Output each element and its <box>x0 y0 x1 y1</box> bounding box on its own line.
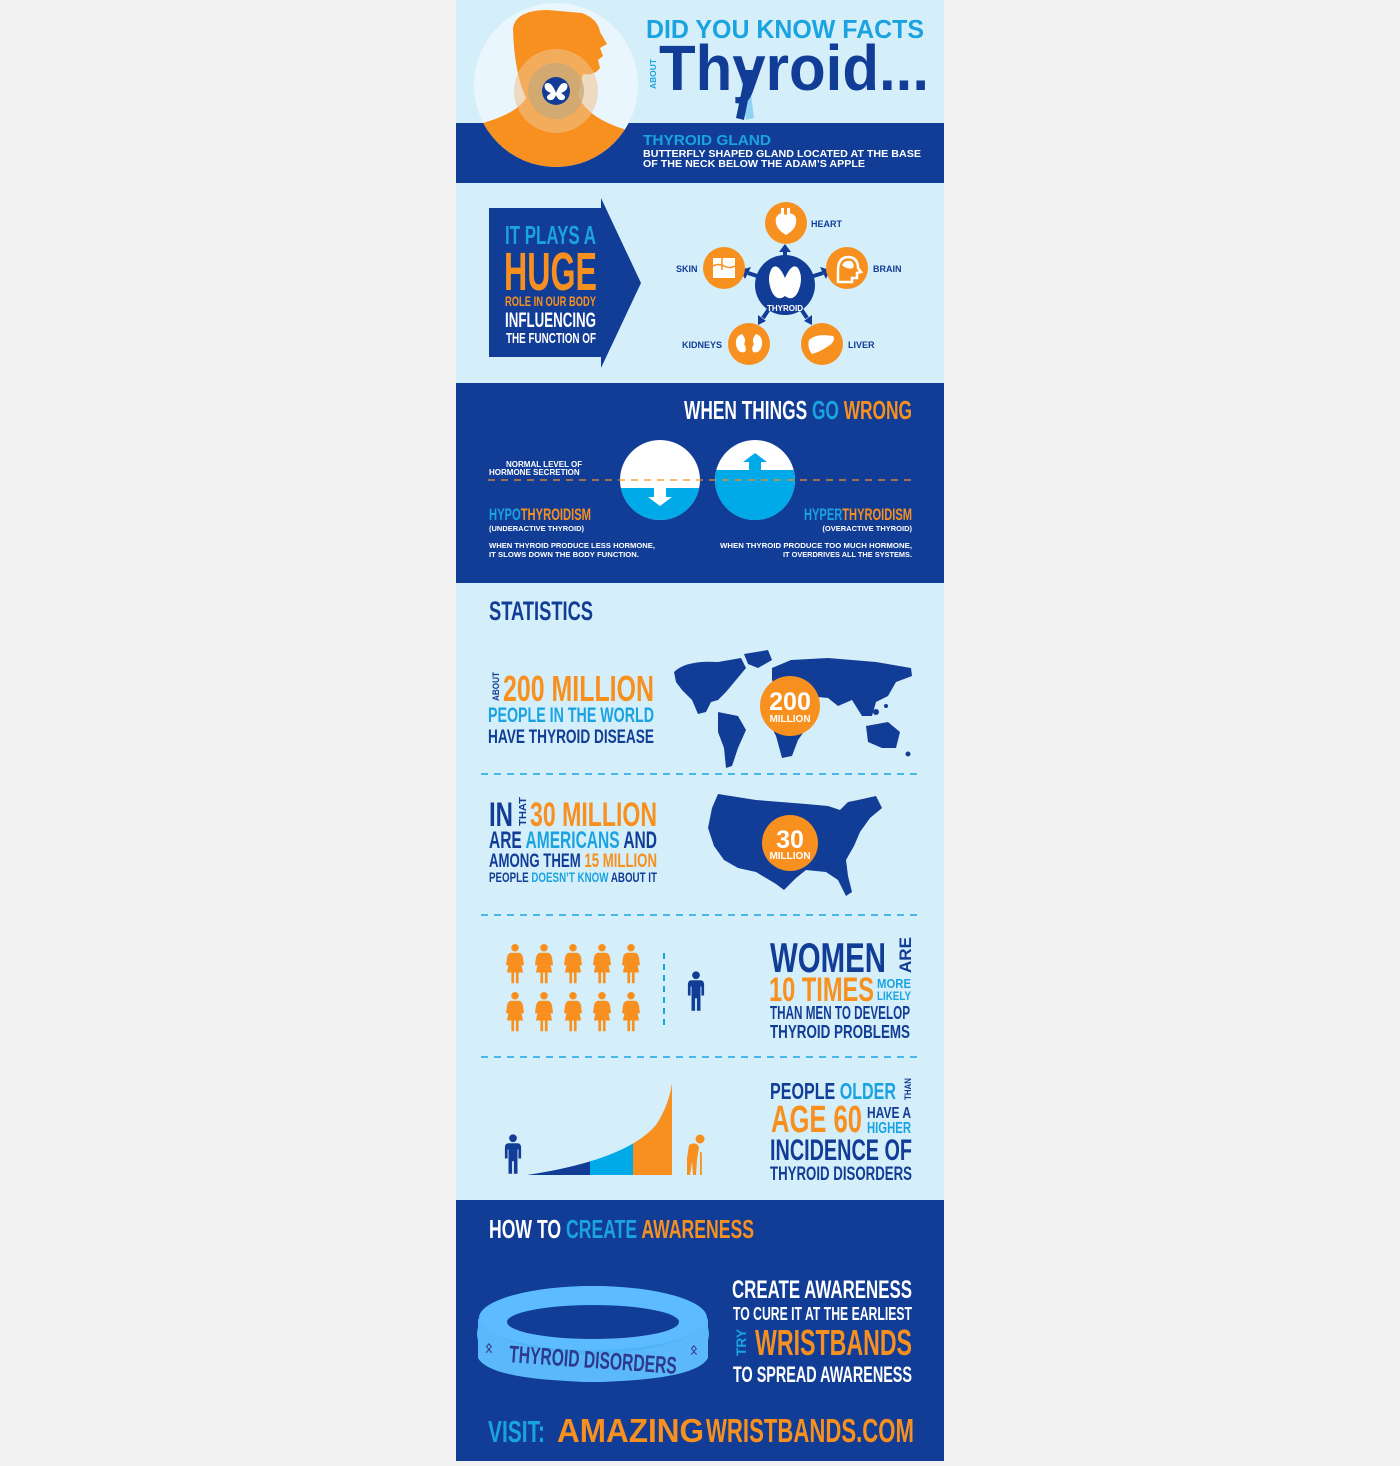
text: hypothyroidism: HYPOTHYROIDISM <box>489 505 591 524</box>
footer: website <box>488 1412 914 1449</box>
text: thyroid gland description: THYROID GLAND <box>643 132 771 149</box>
stat: women 10 times: 10 TIMES <box>769 971 874 1009</box>
stat: 200 million: ABOUT <box>491 672 501 701</box>
stat: age 60: HAVE A <box>867 1105 911 1122</box>
dashed normal line <box>488 479 912 481</box>
text: hypothyroidism: WHEN THYROID PRODUCE LESS HORMONE, <box>489 541 655 550</box>
stat: 30 million americans: AMONG THEM 15 MILLION <box>489 851 657 872</box>
arrow box: THE FUNCTION OF <box>506 330 596 347</box>
icon: butterfly <box>545 83 567 100</box>
circle: hyper <box>715 440 795 520</box>
stat: 200 million: 200 MILLION <box>503 668 654 709</box>
icon: liver <box>801 323 843 365</box>
wristband illustration: THYROID DISORDERS <box>508 1341 678 1380</box>
wristband illustration: ᛟ <box>690 1342 698 1357</box>
badge: 200 million: MILLION <box>769 714 811 725</box>
text: thyroid gland description: OF THE NECK BELOW THE ADAM’S APPLE <box>643 158 865 170</box>
stat: women 10 times <box>769 934 915 1042</box>
arrow box: HUGE <box>504 242 597 302</box>
text: hyperthyroidism: WHEN THYROID PRODUCE TOO MUCH HORMONE, <box>720 541 912 550</box>
arrow box: IT PLAYS A <box>505 220 596 250</box>
header section <box>456 0 944 183</box>
illustration: head with thyroid <box>474 3 638 167</box>
heading: HOW TO CREATE AWARENESS <box>489 1214 754 1244</box>
stat: age 60: THAN <box>903 1078 913 1100</box>
panel: thyroid functions <box>456 183 944 383</box>
stat: women 10 times: ARE <box>896 937 915 973</box>
panel: when things go wrong <box>456 383 944 583</box>
stat: 30 million americans <box>489 796 658 885</box>
badge: 30 million <box>762 815 818 871</box>
stat: age 60: HIGHER <box>867 1120 911 1137</box>
text: hypothyroidism <box>489 505 655 559</box>
text: hyperthyroidism: IT OVERDRIVES ALL THE SYSTEMS. <box>783 550 912 559</box>
label: normal level: HORMONE SECRETION <box>489 468 580 477</box>
stat: age 60: PEOPLE OLDER <box>770 1078 896 1104</box>
stat: women 10 times: MORE <box>877 976 911 991</box>
stat: 200 million <box>488 668 654 748</box>
usa map <box>708 794 882 896</box>
label: normal level: NORMAL LEVEL OF <box>506 460 582 469</box>
diagram: thyroid connections: LIVER <box>848 340 875 350</box>
badge: 30 million: 30 <box>776 826 804 854</box>
title: Thyroid... <box>659 32 929 104</box>
diagram: thyroid connections: KIDNEYS <box>682 340 722 350</box>
stat: 200 million: PEOPLE IN THE WORLD <box>488 704 654 727</box>
title: DID YOU KNOW FACTS <box>646 14 924 44</box>
diagram: thyroid connections <box>676 202 902 365</box>
footer: website: AMAZING <box>557 1412 704 1449</box>
stat: women 10 times: WOMEN <box>770 934 886 981</box>
icon: heart <box>765 202 807 244</box>
text: hypothyroidism: IT SLOWS DOWN THE BODY FUNCTION. <box>489 550 639 559</box>
stat: age 60 <box>770 1078 913 1185</box>
label: normal level <box>489 460 582 477</box>
panel: statistics <box>456 583 944 1200</box>
chart: incidence by age <box>505 1080 704 1180</box>
stat: 30 million americans: PEOPLE DOESN’T KNOW ABOUT IT <box>489 870 658 885</box>
wristband illustration <box>477 1286 709 1382</box>
text: thyroid gland description: BUTTERFLY SHAPED GLAND LOCATED AT THE BASE <box>643 148 921 160</box>
badge: 30 million: MILLION <box>769 851 811 862</box>
diagram: thyroid connections: HEART <box>811 219 843 229</box>
stat: age 60: AGE 60 <box>771 1099 862 1141</box>
wristband illustration: ᛟ <box>485 1340 493 1355</box>
diagram: thyroid connections: SKIN <box>676 264 698 274</box>
text: wristband call to action: TRY <box>733 1328 749 1356</box>
icon: elderly person <box>687 1134 704 1175</box>
title: ABOUT <box>649 59 658 89</box>
title <box>646 14 929 120</box>
footer: website: VISIT: <box>488 1414 545 1449</box>
navy band: thyroid gland <box>456 123 944 183</box>
text: wristband call to action <box>732 1276 912 1387</box>
stat: 200 million: HAVE THYROID DISEASE <box>488 727 654 748</box>
text: thyroid gland description <box>643 132 921 170</box>
pictogram: women vs men <box>506 944 704 1031</box>
badge: 200 million <box>760 676 820 736</box>
arrow box: ROLE IN OUR BODY <box>505 293 596 309</box>
world map <box>674 650 912 768</box>
heading: WHEN THINGS GO WRONG <box>684 395 912 425</box>
stat: women 10 times: LIKELY <box>877 989 911 1003</box>
icon: skin <box>703 247 745 289</box>
text: hyperthyroidism: (OVERACTIVE THYROID) <box>822 524 912 533</box>
arrow box <box>489 198 641 368</box>
heading: STATISTICS <box>489 596 593 626</box>
badge: 200 million: 200 <box>769 688 811 716</box>
diagram: thyroid connections: THYROID <box>767 304 803 313</box>
icon: kidneys <box>728 323 770 365</box>
arrow box: INFLUENCING <box>505 309 596 332</box>
stat: 30 million americans: IN <box>489 796 513 834</box>
infographic <box>456 0 944 1461</box>
diagram: thyroid connections: BRAIN <box>873 264 902 274</box>
circle: hypo <box>620 440 700 520</box>
text: hyperthyroidism <box>720 505 912 559</box>
stat: 30 million americans: 30 MILLION <box>530 796 657 834</box>
stat: 30 million americans: ARE AMERICANS AND <box>489 827 657 854</box>
stat: 30 million americans: THAT <box>518 797 529 826</box>
text: hypothyroidism: (UNDERACTIVE THYROID) <box>489 524 585 533</box>
panel: create awareness <box>456 1200 944 1461</box>
icon: brain <box>826 247 868 289</box>
